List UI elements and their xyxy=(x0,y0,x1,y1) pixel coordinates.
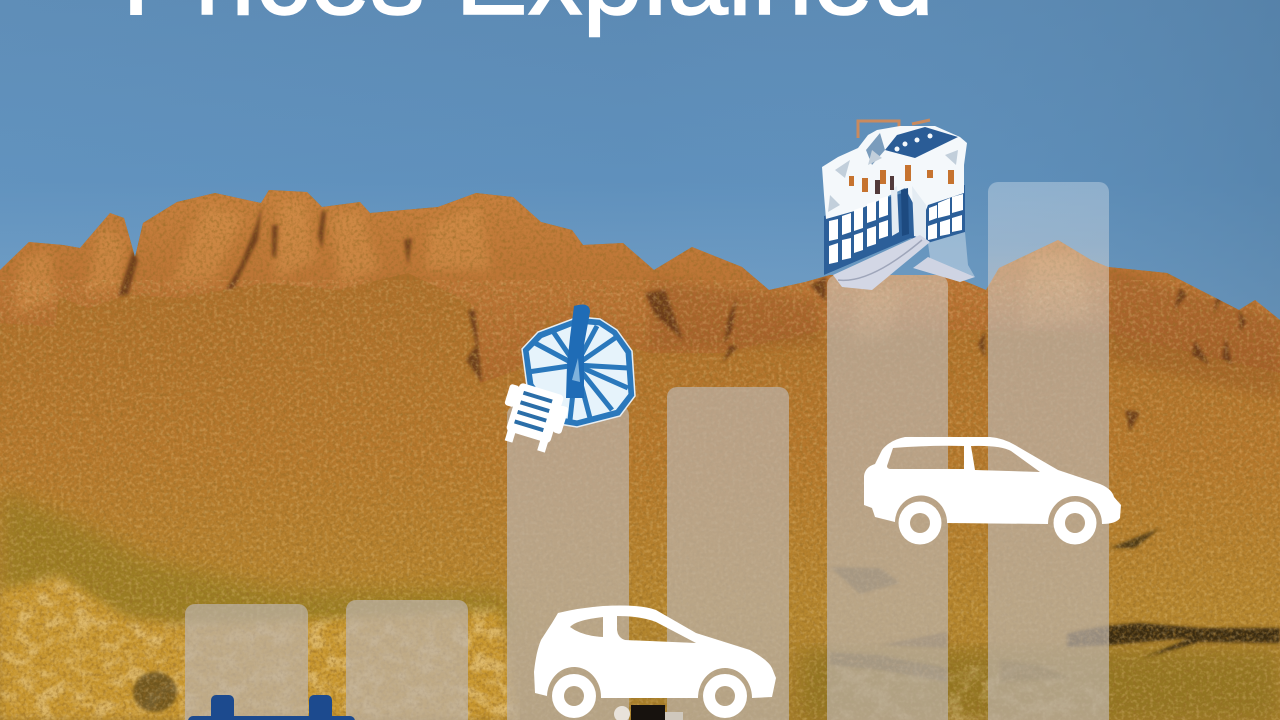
wheel: rear xyxy=(898,501,942,544)
ground shadows xyxy=(830,528,1280,682)
rock shadows and cracks xyxy=(118,205,1246,432)
background: sky xyxy=(0,0,1280,330)
shaded right cliffs xyxy=(650,267,1280,400)
bar 4 xyxy=(667,387,789,720)
lit rock faces xyxy=(16,205,1072,312)
bar 3 xyxy=(507,405,629,720)
icon: small car xyxy=(534,606,776,718)
rock cliffs xyxy=(0,190,1280,383)
icon: navy suitcase at lower left xyxy=(188,695,355,720)
bright foreground foliage xyxy=(0,560,520,720)
entrance columns xyxy=(891,186,926,240)
olive scrub band xyxy=(0,492,507,624)
bar 1 xyxy=(185,604,308,720)
wheel: front xyxy=(703,674,747,718)
icon: hotel building xyxy=(822,120,975,290)
bar 5 xyxy=(827,275,948,720)
entrance stairs xyxy=(913,257,975,282)
background: desert mountain xyxy=(0,180,1280,720)
wheel: rear xyxy=(552,674,596,718)
bar chart: price bars xyxy=(185,182,1109,720)
lounge chair xyxy=(494,380,572,456)
icon: beach umbrella and lounge chair xyxy=(494,304,635,456)
right foreground xyxy=(800,650,1280,720)
icon: partial dark object below car xyxy=(614,705,683,720)
wheel: front xyxy=(1054,501,1096,544)
bar 2 xyxy=(346,600,468,720)
bar 6 xyxy=(988,182,1109,720)
icon: large car xyxy=(864,437,1121,544)
